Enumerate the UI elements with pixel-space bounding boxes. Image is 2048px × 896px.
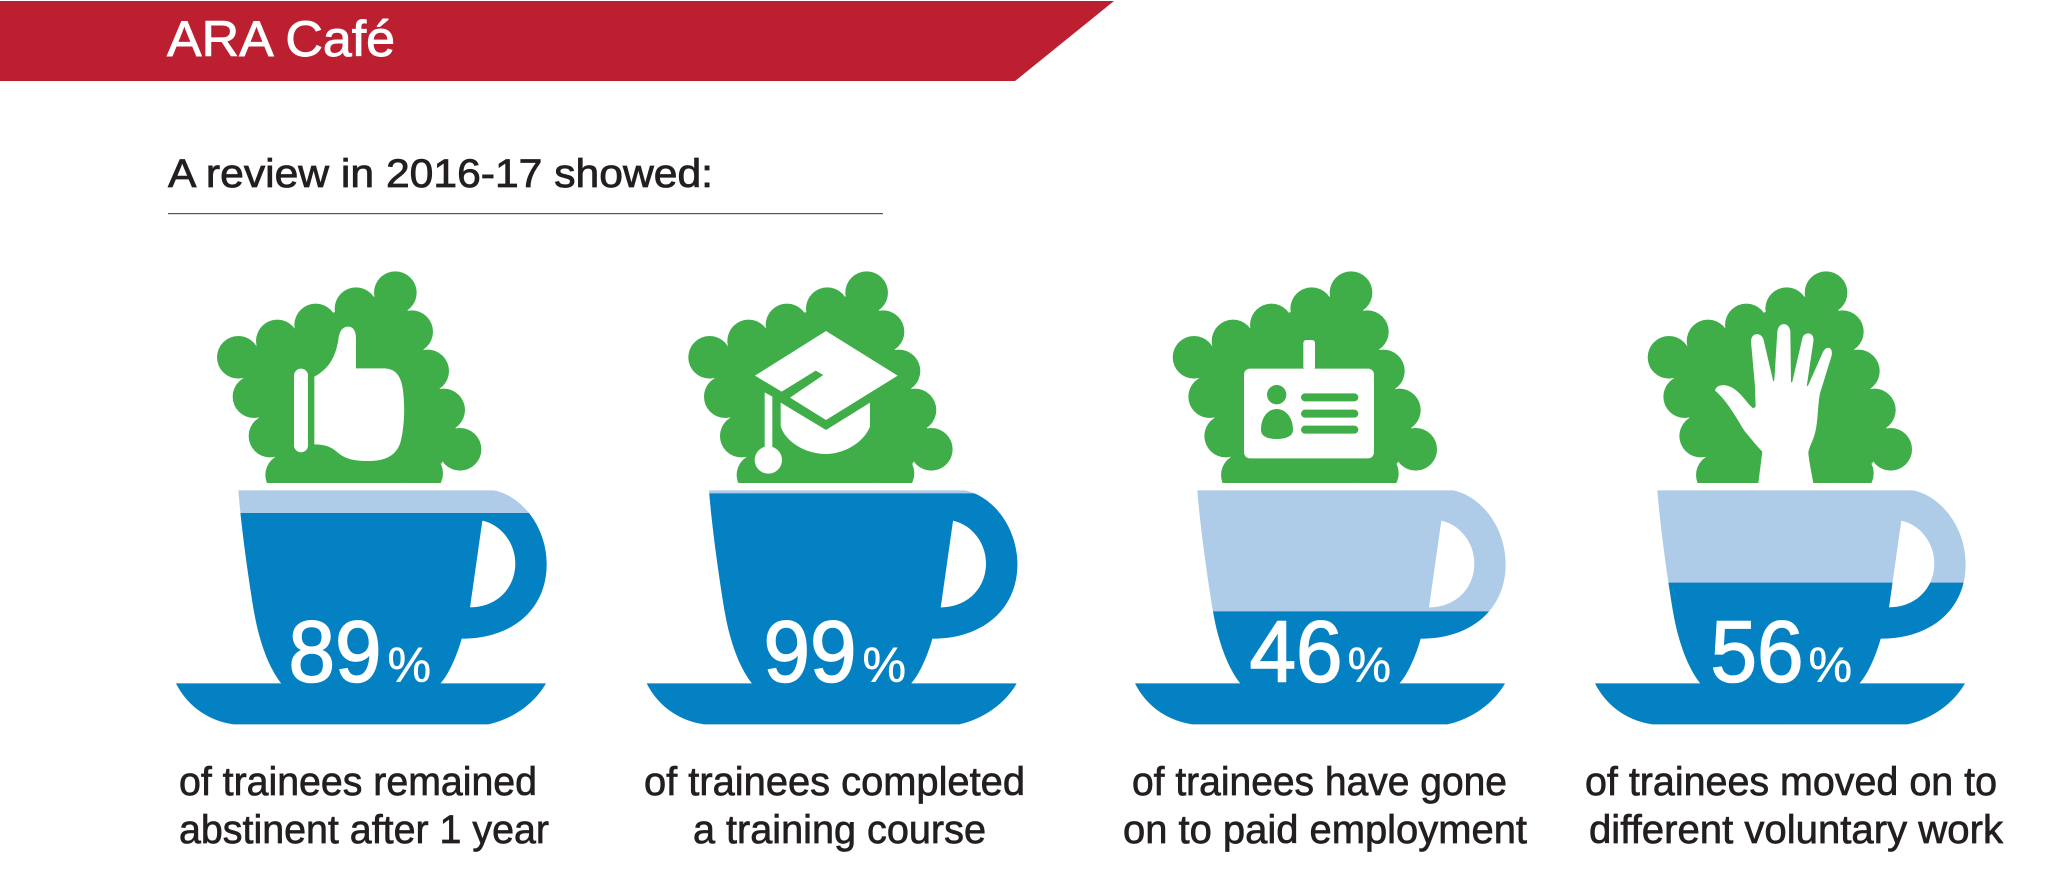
value: 99%: % [862, 638, 906, 692]
caption: abstinent after 1 year [179, 808, 549, 852]
title: ARA Café [167, 11, 395, 67]
cup: 56 percent fill [1595, 490, 1966, 724]
caption: different voluntary work [1589, 808, 2004, 852]
caption: of trainees remained [179, 760, 537, 804]
icon: green bush with ID badge [1173, 271, 1437, 496]
value: 89%: 89 [288, 604, 382, 700]
caption [1123, 760, 1527, 852]
header banner [0, 1, 1114, 81]
panel: 56% voluntary work [1585, 271, 2004, 852]
cup: 46 percent fill [1135, 490, 1506, 724]
panel: 89% abstinent [176, 271, 549, 852]
subtitle: A review in 2016-17 showed: [168, 152, 713, 196]
value: 46% [1250, 604, 1391, 700]
caption: of trainees moved on to [1585, 760, 1997, 804]
icon: green bush with thumbs up [217, 271, 481, 496]
caption [179, 760, 549, 852]
value: 99%: 99 [764, 604, 856, 700]
caption: a training course [693, 808, 986, 852]
panel: 46% paid employment [1123, 271, 1527, 852]
icon: green bush with raised hand [1648, 271, 1912, 496]
value: 56%: % [1808, 638, 1852, 692]
panel: 99% completed course [644, 271, 1025, 852]
value: 99% [764, 604, 906, 700]
value: 46%: % [1348, 638, 1391, 692]
icon: green bush with graduation cap [688, 271, 953, 496]
caption: of trainees completed [644, 760, 1025, 804]
cup: 99 percent fill [647, 490, 1017, 724]
value: 89% [288, 604, 431, 700]
value: 46%: 46 [1250, 604, 1342, 700]
caption [644, 760, 1025, 852]
caption: of trainees have gone [1132, 760, 1507, 804]
value: 56% [1710, 604, 1852, 700]
value: 89%: % [388, 638, 431, 692]
value: 56%: 56 [1710, 604, 1804, 700]
cup: 89 percent fill [176, 490, 547, 724]
caption: on to paid employment [1123, 808, 1527, 852]
caption [1585, 760, 2004, 852]
